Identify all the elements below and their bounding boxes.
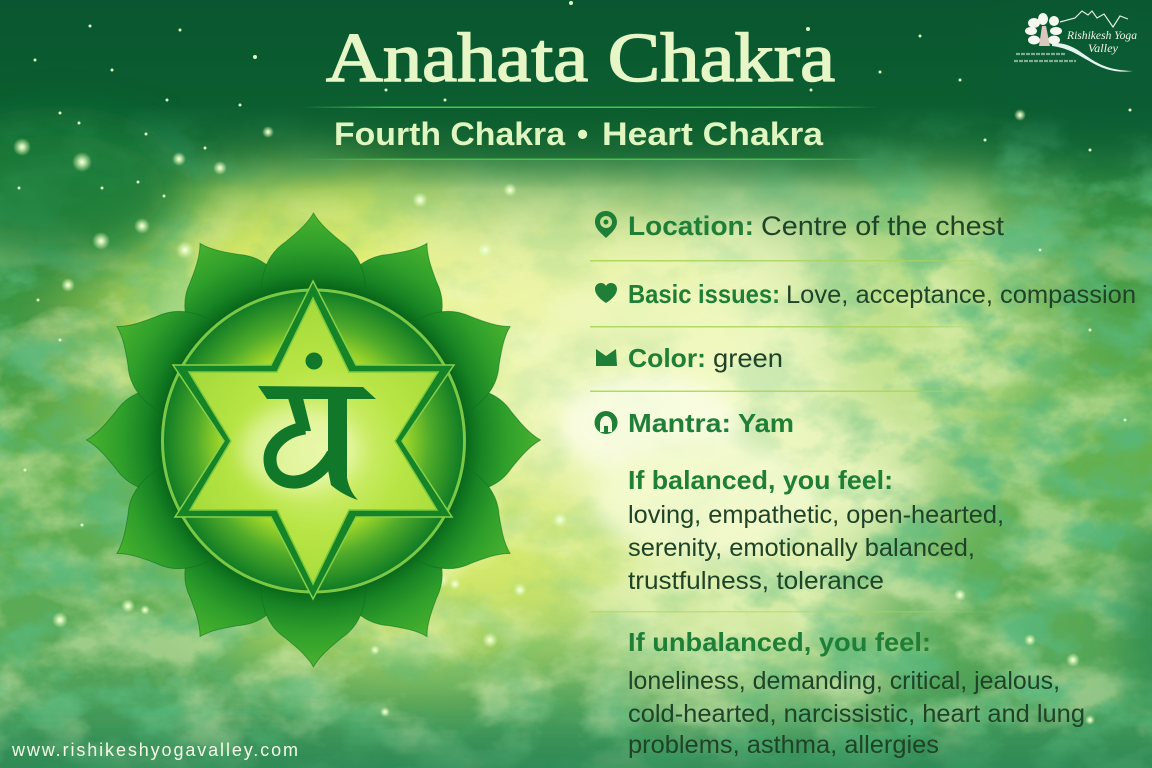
subtitle band (300, 106, 880, 160)
row: mantra: Mantra: (628, 408, 731, 438)
row: location (595, 211, 1005, 241)
block: if balanced (628, 465, 1004, 595)
inner disc (162, 290, 464, 592)
block: if unbalanced (628, 627, 1085, 759)
chakra mandala (86, 213, 540, 667)
logo flower (1025, 13, 1062, 46)
icon: heart (595, 283, 617, 303)
six-pointed star (173, 281, 454, 599)
row: color: green (713, 343, 783, 373)
website url: www.rishikeshyogavalley.com (11, 740, 298, 760)
subtitle band: Heart Chakra (602, 116, 823, 152)
title: Anahata Chakra (326, 20, 835, 97)
icon: mantra symbol (595, 411, 618, 434)
block: if balanced: serenity, emotionally balanced, (628, 534, 975, 562)
row: mantra (595, 408, 794, 438)
lotus petals (86, 213, 540, 667)
logo: Rishikesh Yoga (1066, 30, 1137, 42)
bija symbol (258, 386, 376, 500)
row: color (596, 343, 783, 373)
panel: chakra facts (590, 211, 1136, 759)
icon: location pin (595, 211, 617, 238)
bija dot (306, 352, 322, 370)
logo (1014, 11, 1137, 72)
icon: color swatch (596, 349, 617, 366)
row: basic issues (595, 279, 1136, 309)
block: if unbalanced: loneliness, demanding, critical, jealous, (628, 667, 1060, 695)
row: mantra: Yam (738, 408, 794, 438)
row: location: Location: (628, 211, 754, 241)
row: color: Color: (628, 343, 706, 373)
subtitle band: • (577, 116, 588, 152)
block: if unbalanced: problems, asthma, allergies (628, 731, 939, 759)
block: if unbalanced: If unbalanced, you feel: (628, 627, 931, 657)
block: if balanced: loving, empathetic, open-hearted, (628, 501, 1004, 529)
block: if balanced: If balanced, you feel: (628, 465, 893, 495)
block: if balanced: trustfulness, tolerance (628, 567, 884, 595)
subtitle band: Fourth Chakra (334, 116, 565, 152)
row: location: Centre of the chest (761, 211, 1005, 241)
block: if unbalanced: cold-hearted, narcissistic, heart and lung (628, 700, 1085, 728)
logo: Valley (1088, 43, 1119, 55)
row: basic issues: Basic issues: (628, 279, 780, 309)
row: basic issues: Love, acceptance, compassion (786, 281, 1136, 309)
